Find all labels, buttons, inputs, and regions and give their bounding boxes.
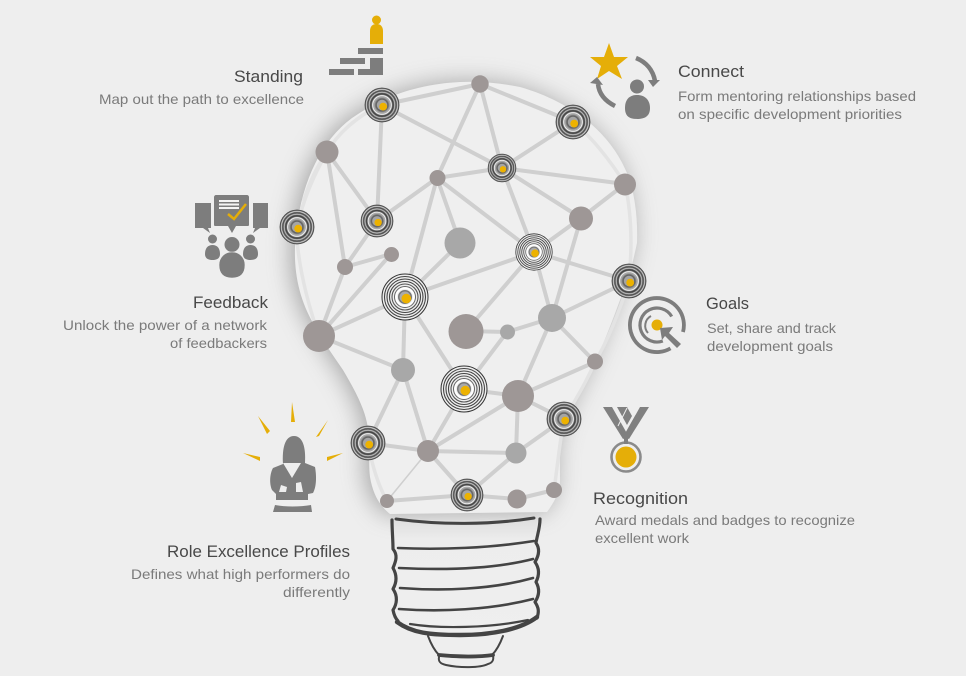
network connections: [319, 84, 629, 501]
network nodes: plain: [303, 75, 636, 509]
heading and text: role excellence profiles: Defines what high performers do: [131, 566, 350, 582]
heading and text: recognition: excellent work: [595, 530, 690, 546]
heading and text: goals: [706, 294, 837, 354]
heading and text: role excellence profiles: differently: [283, 584, 350, 600]
heading and text: feedback: [63, 293, 268, 351]
heading and text: connect: Form mentoring relationships based: [678, 88, 916, 104]
heading and text: recognition: [593, 489, 855, 546]
heading and text: role excellence profiles: Role Excellence Profiles: [167, 542, 350, 561]
heading and text: standing: Standing: [234, 67, 303, 86]
heading and text: connect: [678, 62, 916, 122]
icon: standing: [329, 16, 383, 75]
heading and text: feedback: of feedbackers: [170, 335, 267, 351]
icon: feedback: [195, 195, 268, 278]
heading and text: goals: Set, share and track: [707, 320, 837, 336]
heading and text: connect: Connect: [678, 62, 744, 81]
panel: lightbulb glass: [291, 82, 637, 514]
network nodes: target rings: [280, 88, 646, 511]
heading and text: goals: Goals: [706, 294, 749, 313]
icon: role excellence figure: [243, 402, 343, 512]
icon: recognition medal: [603, 407, 649, 472]
heading and text: feedback: Unlock the power of a network: [63, 317, 268, 333]
heading and text: standing: [99, 67, 304, 107]
icon: goals: [630, 298, 684, 352]
icon: connect: [590, 43, 660, 119]
heading and text: recognition: Recognition: [593, 489, 688, 508]
heading and text: standing: Map out the path to excellence: [99, 91, 304, 107]
heading and text: goals: development goals: [707, 338, 833, 354]
heading and text: recognition: Award medals and badges to recognize: [595, 512, 855, 528]
heading and text: feedback: Feedback: [193, 293, 268, 312]
heading and text: role excellence profiles: [131, 542, 350, 600]
panel: lightbulb screw base: [392, 518, 540, 667]
heading and text: connect: on specific development priorities: [678, 106, 902, 122]
